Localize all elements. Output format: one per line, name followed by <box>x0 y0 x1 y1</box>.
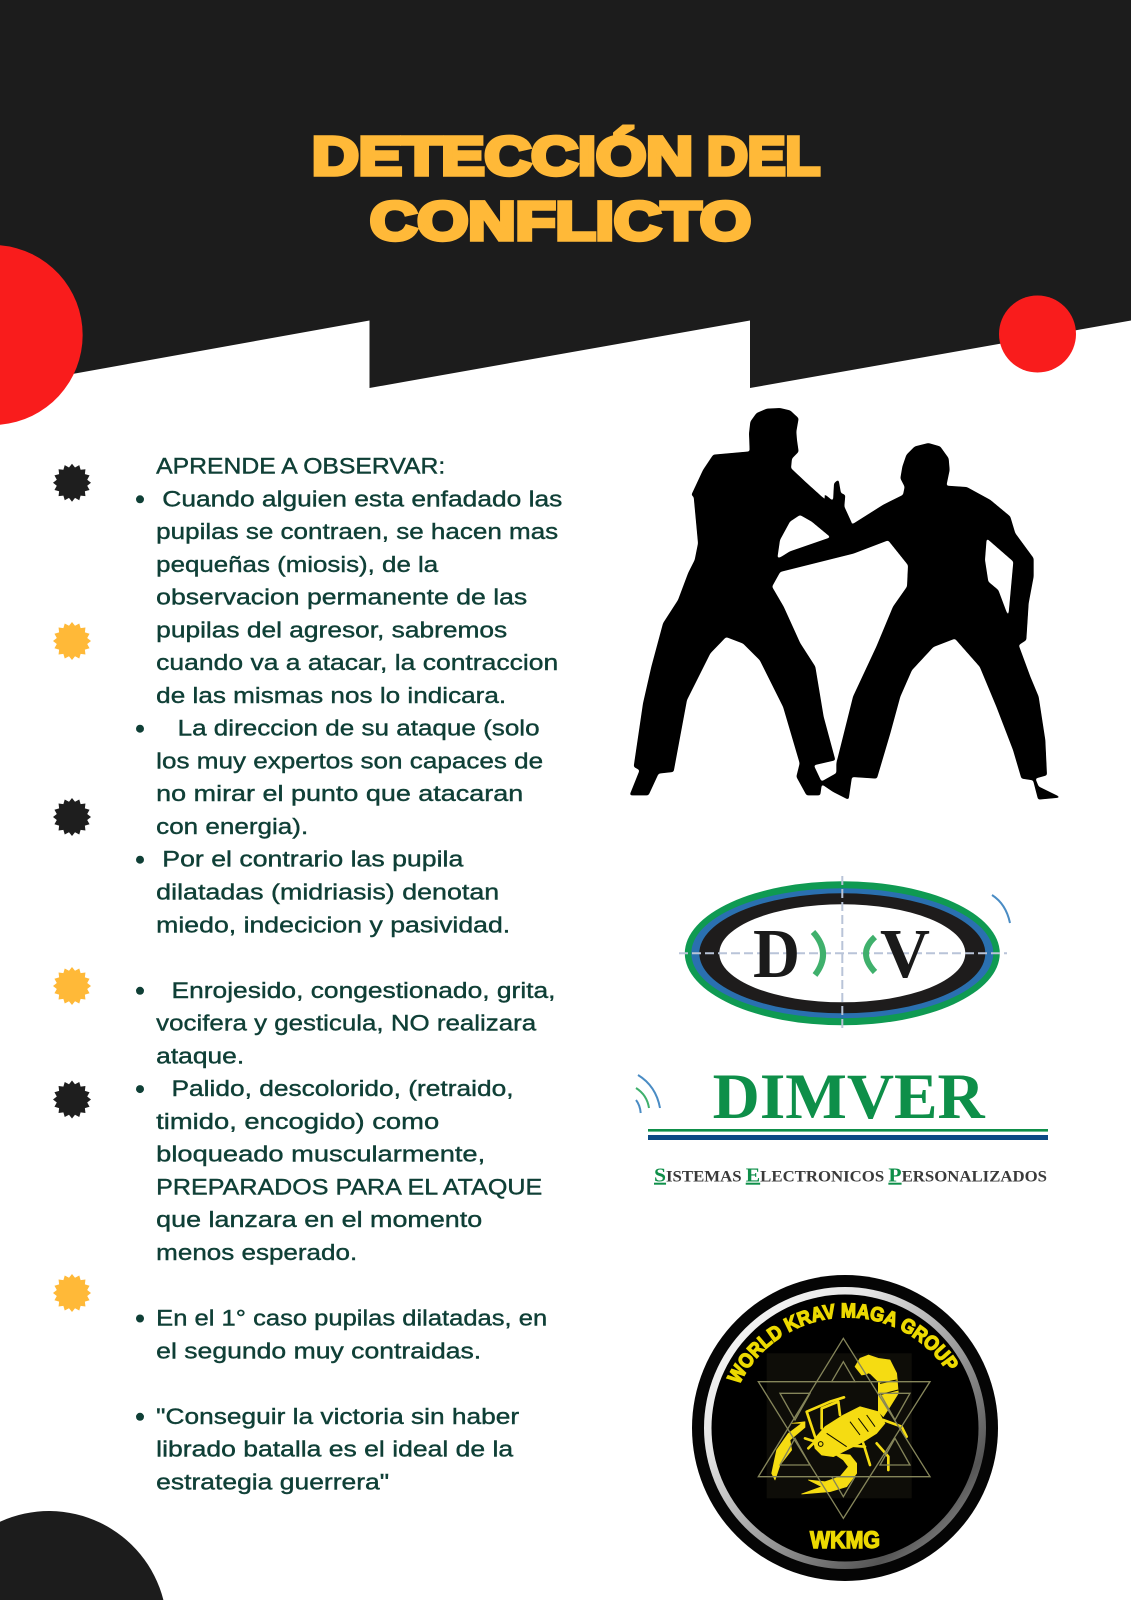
bullet: cita <box>136 1404 519 1494</box>
bullet: pupilas contraidas: cuando va a atacar, la contraccion <box>156 650 558 675</box>
bullet: pupilas contraidas: pequeñas (miosis), de la <box>156 552 439 577</box>
logo: D V oval <box>679 876 1010 1030</box>
silhouette of two fighters <box>620 390 1087 823</box>
title <box>312 126 820 252</box>
bullet: pupilas contraidas <box>136 486 562 708</box>
logo: D V oval: V <box>880 916 930 993</box>
WKMG label: WKMG <box>810 1527 880 1554</box>
arm gap <box>777 515 831 558</box>
dark emblem square <box>767 1353 912 1498</box>
starburst bullets column <box>53 464 91 1312</box>
bullet: palido <box>136 1076 542 1265</box>
fighter right <box>777 443 1060 799</box>
title: CONFLICTO <box>370 192 751 252</box>
star of david <box>758 1338 930 1518</box>
body text column <box>136 454 562 1494</box>
bullet: direccion del ataque: los muy expertos son capaces de <box>156 748 543 773</box>
arc text <box>739 1317 954 1385</box>
bullet: direccion del ataque: con energia). <box>156 814 308 839</box>
scorpion shell details <box>818 1373 898 1447</box>
bullet: pupilas contraidas: Cuando alguien esta enfadado las <box>162 486 562 511</box>
intro heading: APRENDE A OBSERVAR: <box>156 454 445 478</box>
bullet: palido: menos esperado. <box>156 1240 357 1265</box>
logo: WKMG badge <box>692 1275 998 1581</box>
bullet: palido: timido, encogido) como <box>156 1109 439 1134</box>
title: DETECCIÓN <box>312 126 693 186</box>
double rule <box>648 1129 1048 1140</box>
burst: yellow 3 <box>53 1274 91 1312</box>
bullet: enrojecido: vocifera y gesticula, NO realizara <box>156 1011 537 1036</box>
bullet: cita: "Conseguir la victoria sin haber <box>156 1404 519 1429</box>
burst: black 3 <box>53 1080 91 1118</box>
DIMVER name: DIMVER <box>713 1061 986 1133</box>
bullet: palido: que lanzara en el momento <box>156 1207 482 1232</box>
bullet: pupilas dilatadas: dilatadas (midriasis) denotan <box>156 880 499 904</box>
decorative red circle left <box>0 245 83 425</box>
header banner with sawtooth edge <box>0 0 1131 388</box>
tagline: SISTEMAS ELECTRONICOS PERSONALIZADOS <box>654 1165 1047 1187</box>
bullet: pupilas dilatadas <box>136 847 510 937</box>
torso gap <box>985 538 1013 617</box>
bullet: pupilas contraidas: de las mismas nos lo indicara. <box>156 683 506 708</box>
logo: DIMVER wordmark <box>636 1061 1048 1187</box>
bullet: primer caso: En el 1° caso pupilas dilatadas, en <box>156 1306 547 1330</box>
fighter left <box>630 408 852 795</box>
bullet: palido: PREPARADOS PARA EL ATAQUE <box>156 1174 542 1199</box>
bullet: enrojecido <box>136 978 556 1068</box>
bullet: cita: librado batalla es el ideal de la <box>156 1437 514 1462</box>
burst: black 2 <box>53 798 91 836</box>
bullet: direccion del ataque <box>136 716 543 839</box>
logo: WKMG badge: WORLD KRAV MAGA GROUP <box>726 1302 958 1383</box>
bullet: pupilas dilatadas: Por el contrario las pupila <box>162 847 464 872</box>
bullet: cita: estrategia guerrera" <box>156 1469 389 1494</box>
bullet: pupilas contraidas: observacion permanente de las <box>156 585 527 610</box>
badge disc and chrome ring <box>692 1275 998 1581</box>
signal arcs <box>636 1075 660 1113</box>
bullet: direccion del ataque: La direccion de su ataque (solo <box>178 716 540 741</box>
bullet: palido: bloqueado muscularmente, <box>156 1142 485 1167</box>
bullet: pupilas contraidas: pupilas se contraen, se hacen mas <box>156 519 558 544</box>
bullet: enrojecido: ataque. <box>156 1043 244 1068</box>
bullet: palido: Palido, descolorido, (retraido, <box>172 1076 514 1101</box>
bullet: primer caso: el segundo muy contraidas. <box>156 1338 481 1363</box>
bullet: pupilas contraidas: pupilas del agresor, sabremos <box>156 617 507 642</box>
bullet: pupilas dilatadas: miedo, indecicion y pasividad. <box>156 912 510 937</box>
decorative red circle right <box>999 296 1076 372</box>
bullet: primer caso <box>136 1306 547 1363</box>
title: DEL <box>707 126 820 186</box>
burst: black 1 <box>53 464 91 502</box>
bullet: enrojecido: Enrojesido, congestionado, grita, <box>172 978 556 1003</box>
logo: D V oval: D <box>753 916 800 993</box>
bullet: direccion del ataque: no mirar el punto que atacaran <box>156 781 523 806</box>
burst: yellow 1 <box>53 622 91 660</box>
decorative black circle bottom left <box>0 1511 163 1600</box>
scorpion <box>772 1355 907 1494</box>
burst: yellow 2 <box>53 967 91 1005</box>
